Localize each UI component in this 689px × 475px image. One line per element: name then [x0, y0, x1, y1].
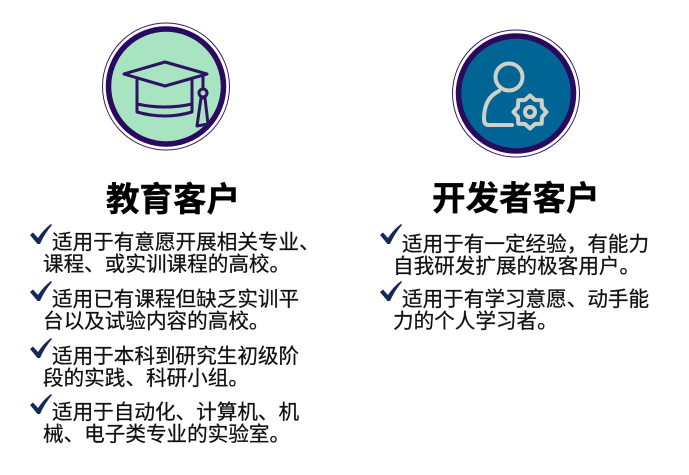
list item: developer 1: 自我研发扩展的极客用户。 — [393, 254, 640, 278]
icon: check mark — [380, 281, 402, 301]
icon: check mark — [30, 281, 52, 301]
list item: developer 1: 适用于有一定经验，有能力 — [402, 227, 649, 257]
list item: education 1: 课程、或实训课程的高校。 — [43, 252, 290, 276]
heading: education customers: 教育客户 — [106, 182, 240, 219]
list item: education 4 — [30, 394, 299, 446]
list item: developer 1 — [380, 224, 649, 278]
list item: education 4: 适用于自动化、计算机、机 — [52, 401, 299, 424]
list item: education 3: 段的实践、科研小组。 — [43, 366, 249, 390]
list item: developer 2 — [380, 281, 649, 332]
list item: developer 2: 力的个人学习者。 — [393, 310, 558, 332]
icon: check mark — [380, 224, 402, 244]
icon: check mark — [30, 394, 52, 414]
list item: developer 2: 适用于有学习意愿、动手能 — [402, 288, 649, 311]
list item: education 3: 适用于本科到研究生初级阶 — [52, 345, 299, 368]
icon: check mark — [30, 338, 52, 358]
list item: education 1 — [30, 224, 320, 276]
icon: check mark — [30, 224, 52, 244]
list item: education 4: 械、电子类专业的实验室。 — [43, 422, 290, 446]
list item: education 3 — [30, 338, 299, 390]
list item: education 1: 适用于有意愿开展相关专业、 — [52, 231, 320, 254]
icon: developer user with gear badge — [452, 30, 580, 158]
icon: graduation cap badge — [102, 22, 230, 150]
list item: education 2: 适用已有课程但缺乏实训平 — [52, 288, 299, 311]
heading: developer customers: 开发者客户 — [432, 181, 600, 218]
list item: education 2: 台以及试验内容的高校。 — [43, 310, 270, 332]
list item: education 2 — [30, 281, 299, 332]
